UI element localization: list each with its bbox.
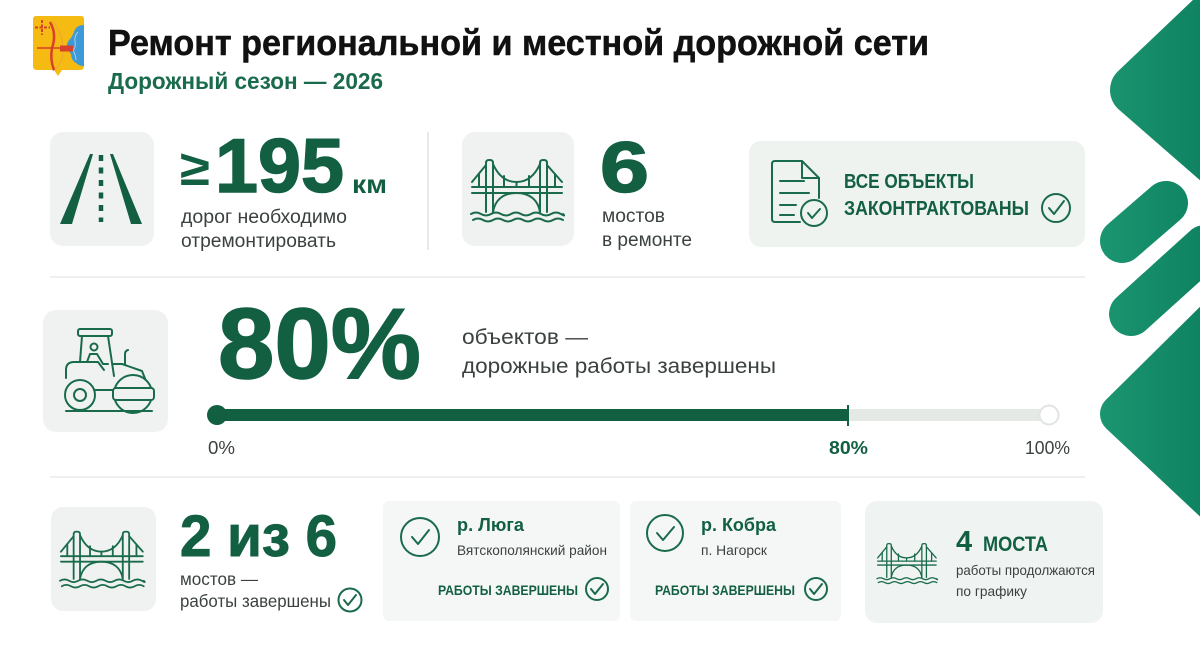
icon: road [50, 132, 154, 246]
text: Luga river: р. Люга [457, 515, 525, 535]
text: finished caption: работы завершены [180, 591, 331, 611]
card: 4 bridges ongoing [865, 501, 1103, 623]
text: Kobra river: р. Кобра [701, 515, 777, 535]
icon: check [647, 515, 683, 551]
text: contracted: ВСЕ ОБЪЕКТЫ [844, 171, 974, 193]
text: roads caption: отремонтировать [181, 231, 336, 252]
icon: check [401, 518, 439, 556]
text: district: Вятскополянский район [457, 542, 607, 558]
bar labels: 0% [208, 437, 235, 458]
bar labels: 80% [829, 437, 868, 458]
icon: bridge [462, 132, 574, 246]
stat: 2 of 6: 2 из 6 [180, 504, 337, 569]
title: Ремонт региональной и местной дорожной сети [108, 22, 929, 63]
icon: road roller [43, 310, 168, 432]
panel: bridges finished [51, 504, 362, 612]
subtitle: Дорожный сезон — 2026 [108, 68, 383, 94]
card: Kobra river [630, 501, 841, 621]
progress bar [207, 405, 1058, 426]
coat of arms of Kirov region [33, 16, 84, 76]
icon: check [338, 588, 362, 612]
icon: bridge [51, 507, 156, 611]
stat: 4 bridges: 4 [956, 526, 972, 558]
status: works completed: РАБОТЫ ЗАВЕРШЕНЫ [438, 582, 578, 598]
panel: all objects contracted [749, 141, 1085, 247]
panel: completion progress [43, 288, 1070, 458]
stat: at least 195 km [180, 124, 387, 209]
text: settlement: п. Нагорск [701, 542, 768, 558]
panel: bridges in repair [462, 129, 692, 251]
text: contracted: ЗАКОНТРАКТОВАНЫ [844, 198, 1029, 220]
stat: 6 bridges: 6 [600, 129, 649, 208]
stat: at least 195 km: ≥ [180, 140, 210, 196]
text: ongoing caption: работы продолжаются [956, 562, 1095, 578]
stat: at least 195 km: км [352, 171, 387, 199]
card: Luga river [383, 501, 620, 621]
stat: 4 bridges: МОСТА [983, 533, 1048, 556]
status: works completed [655, 578, 827, 600]
text: completion caption: объектов — [462, 325, 589, 349]
text: bridges caption: мостов [602, 206, 665, 227]
icon: document with check [772, 161, 827, 226]
icon: bridge [877, 544, 938, 584]
bar labels [208, 437, 1070, 458]
text: ongoing caption: по графику [956, 583, 1027, 599]
text: roads caption: дорог необходимо [181, 207, 347, 228]
background decoration: green diamonds and pills [1120, 0, 1200, 583]
text: finished caption: мостов — [180, 569, 258, 589]
status: works completed: РАБОТЫ ЗАВЕРШЕНЫ [655, 582, 795, 598]
panel: road length [50, 124, 387, 252]
text: bridges caption: в ремонте [602, 230, 692, 251]
status: works completed [438, 578, 608, 600]
icon: check [1042, 194, 1070, 222]
stat: 80 percent: 80% [218, 288, 421, 400]
text: completion caption: дорожные работы завершены [462, 354, 776, 378]
bar labels: 100% [1025, 437, 1070, 458]
stat: at least 195 km: 195 [215, 124, 344, 209]
